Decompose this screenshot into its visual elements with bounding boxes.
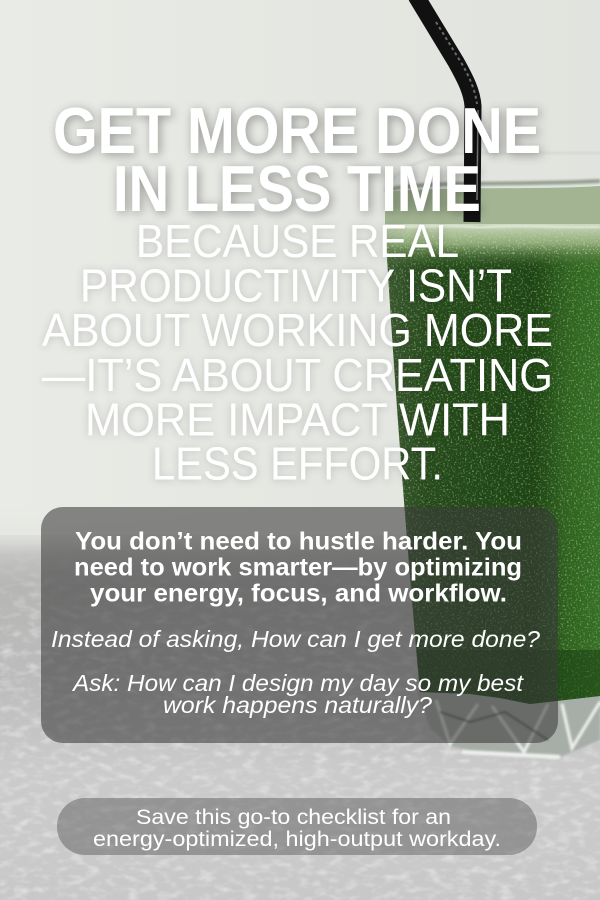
italic reframe: Ask: How can I design my day so my best bbox=[71, 670, 525, 696]
italic reframe bbox=[71, 670, 525, 718]
italic reframe: work happens naturally? bbox=[163, 692, 432, 718]
subtitle: MORE IMPACT WITH bbox=[85, 394, 510, 446]
title line 1: GET MORE DONE bbox=[53, 94, 541, 167]
bold statement: need to work smarter—by optimizing bbox=[74, 554, 522, 582]
subtitle: LESS EFFORT. bbox=[152, 438, 443, 490]
foam line bbox=[384, 225, 600, 228]
subtitle: ABOUT WORKING MORE bbox=[42, 304, 553, 356]
bold statement: You don’t need to hustle harder. You bbox=[75, 528, 522, 556]
background: textured table bbox=[0, 522, 600, 900]
photo: green smoothie glass bbox=[380, 153, 600, 757]
callout pill bbox=[57, 798, 537, 855]
bold statement bbox=[74, 528, 522, 608]
subtitle: —IT’S ABOUT CREATING bbox=[42, 349, 553, 401]
callout text: Save this go-to checklist for an bbox=[136, 806, 451, 829]
panel: main message bbox=[41, 507, 558, 743]
bold statement: your energy, focus, and workflow. bbox=[90, 580, 507, 608]
glass rim bbox=[384, 153, 600, 192]
pale upper drink behind glass bbox=[385, 186, 600, 228]
background: wall bbox=[0, 0, 600, 545]
title line 2: IN LESS TIME bbox=[113, 152, 481, 225]
panel background bbox=[41, 507, 558, 743]
icon: black metal straw bbox=[416, 0, 478, 222]
callout text bbox=[93, 806, 501, 851]
smoothie bbox=[380, 224, 600, 709]
subtitle bbox=[42, 215, 553, 490]
callout text: energy-optimized, high-output workday. bbox=[93, 828, 501, 851]
glass foot bbox=[416, 688, 600, 757]
callout: save checklist bbox=[57, 798, 537, 855]
italic question: Instead of asking, How can I get more done? bbox=[51, 626, 540, 652]
title bbox=[53, 94, 541, 225]
subtitle: BECAUSE REAL bbox=[136, 215, 459, 267]
subtitle: PRODUCTIVITY ISN’T bbox=[80, 260, 512, 312]
